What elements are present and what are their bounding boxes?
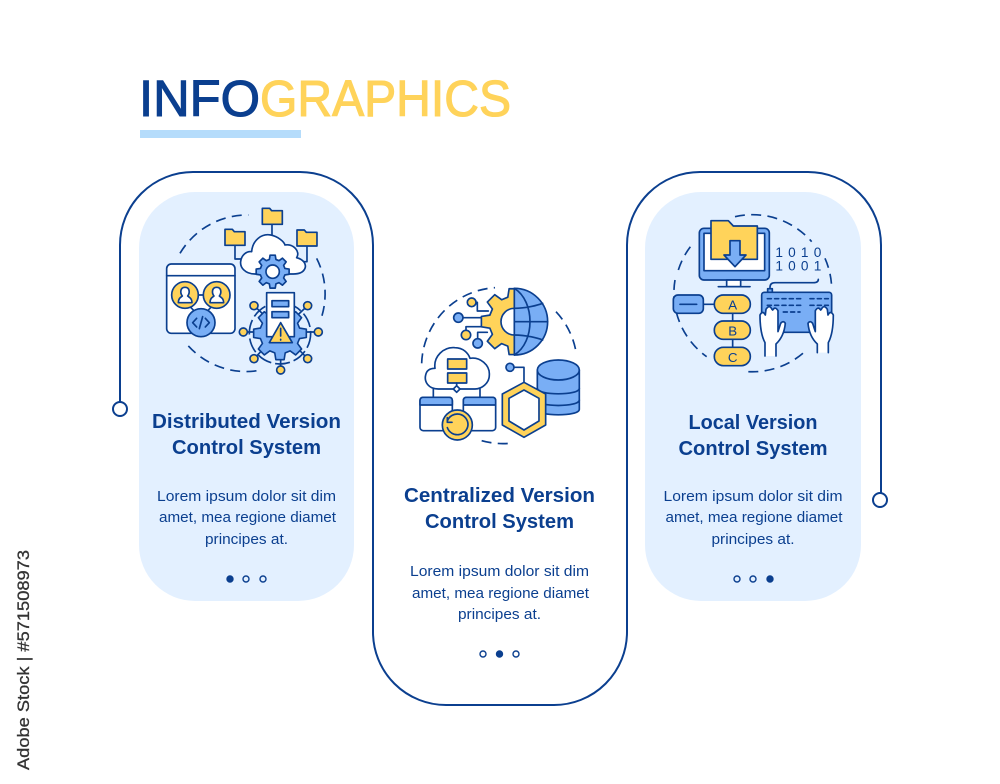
text: local description: Lorem ipsum dolor sit dim: [664, 488, 842, 505]
connecting outline: [113, 172, 887, 705]
title: INFO: [139, 70, 260, 127]
text: distributed description: amet, mea regione diamet: [159, 509, 337, 526]
heading: centralized: Centralized Version: [404, 485, 595, 507]
heading: centralized: Control System: [425, 511, 574, 533]
heading: local: Local Version: [688, 412, 818, 434]
pagination dots: [480, 651, 519, 657]
stock id caption: Adobe Stock | #571508973: [14, 550, 33, 770]
text: local description: amet, mea regione diamet: [666, 509, 843, 526]
panel: centralized version control: [404, 288, 595, 657]
pagination dots: [734, 576, 773, 582]
heading: local: Control System: [678, 438, 828, 460]
icon: local system: [673, 215, 833, 372]
icon: local system: A: [728, 298, 737, 313]
title underline: [140, 130, 301, 138]
text: centralized description: principes at.: [458, 606, 541, 623]
icon: local system: C: [728, 350, 738, 365]
panel: local version control: [645, 192, 861, 601]
panel: distributed version control: [139, 192, 354, 601]
icon: local system: 1 0 0 1: [775, 258, 821, 273]
pagination dots: [227, 576, 266, 582]
text: local description: principes at.: [712, 531, 794, 548]
heading: distributed: Distributed Version: [152, 411, 341, 433]
text: centralized description: amet, mea regione diamet: [412, 585, 590, 602]
icon: centralized system: [420, 288, 579, 444]
text: centralized description: Lorem ipsum dolor sit dim: [410, 563, 589, 580]
text: distributed description: Lorem ipsum dolor sit dim: [157, 488, 336, 505]
text: distributed description: principes at.: [205, 531, 288, 548]
heading: distributed: Control System: [172, 437, 321, 459]
title: GRAPHICS: [260, 70, 511, 127]
icon: local system: 1 0 1 0: [775, 245, 822, 260]
title: [139, 70, 511, 127]
icon: local system: B: [728, 324, 737, 339]
icon: distributed system: [167, 208, 325, 374]
